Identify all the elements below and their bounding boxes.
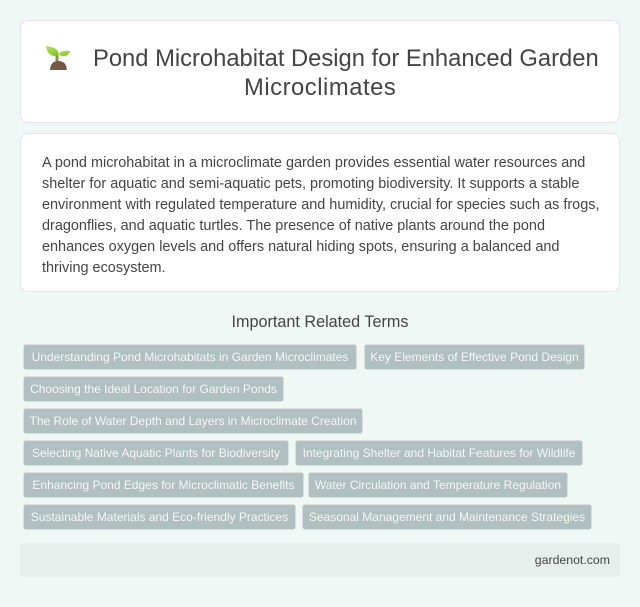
footer xyxy=(20,543,620,577)
related terms tags xyxy=(23,344,592,530)
tag: Integrating Shelter and Habitat Features for Wildlife xyxy=(303,446,575,460)
icon: seedling xyxy=(46,46,70,70)
tag xyxy=(23,440,289,466)
description text xyxy=(42,155,599,276)
footer source text: gardenot.com xyxy=(535,553,610,567)
tag: Enhancing Pond Edges for Microclimatic Benefits xyxy=(32,478,295,492)
header panel xyxy=(20,20,620,123)
description text: thriving ecosystem. xyxy=(42,260,166,276)
tag xyxy=(23,408,363,434)
tag: Key Elements of Effective Pond Design xyxy=(370,350,579,364)
tag xyxy=(364,344,585,370)
title: Microclimates xyxy=(244,74,396,101)
tag xyxy=(23,376,284,402)
tag: Selecting Native Aquatic Plants for Biodiversity xyxy=(32,446,280,460)
tag: Choosing the Ideal Location for Garden Ponds xyxy=(30,382,277,396)
description panel xyxy=(20,133,620,292)
tag xyxy=(308,472,568,498)
tag: Understanding Pond Microhabitats in Garden Microclimates xyxy=(32,350,348,364)
tag: Water Circulation and Temperature Regulation xyxy=(315,478,561,492)
title xyxy=(93,45,599,101)
tag xyxy=(23,504,296,530)
tag xyxy=(23,344,357,370)
description text: enhances oxygen levels and offers natural hiding spots, ensuring a balanced and xyxy=(42,239,559,255)
description text: dragonflies, and aquatic turtles. The presence of native plants around the pond xyxy=(42,218,545,234)
tag xyxy=(23,472,304,498)
title: Pond Microhabitat Design for Enhanced Garden xyxy=(93,45,599,72)
related terms heading: Important Related Terms xyxy=(232,313,408,331)
tag xyxy=(295,440,583,466)
tag: Sustainable Materials and Eco-friendly Practices xyxy=(31,510,288,524)
tag: Seasonal Management and Maintenance Strategies xyxy=(309,510,585,524)
description text: shelter for aquatic and semi-aquatic pets, promoting biodiversity. It supports a stable xyxy=(42,176,579,192)
description text: A pond microhabitat in a microclimate garden provides essential water resources and xyxy=(42,155,585,171)
description text: environment with regulated temperature and humidity, crucial for species such as frogs, xyxy=(42,197,599,213)
tag xyxy=(302,504,592,530)
tag: The Role of Water Depth and Layers in Microclimate Creation xyxy=(29,414,357,428)
